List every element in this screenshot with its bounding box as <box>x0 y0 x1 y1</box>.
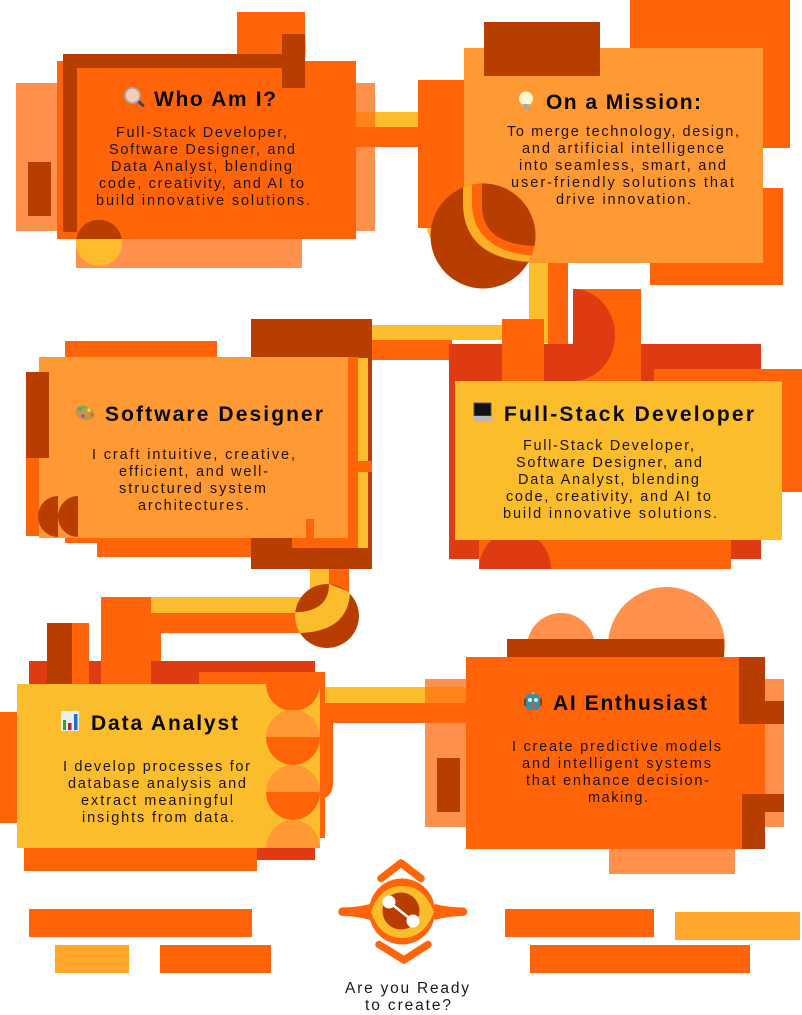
connector: who am i to mission <box>375 112 420 147</box>
text: full-stack body <box>503 438 717 522</box>
text: mission body: user-friendly solutions that <box>511 175 734 191</box>
text: who am i body: Data Analyst, blending <box>111 159 292 175</box>
text: mission body: drive innovation. <box>556 192 691 208</box>
text: mission body <box>507 124 739 208</box>
decorative circle: connector joint <box>293 584 359 648</box>
icon: light bulb <box>519 92 533 110</box>
text: closing question <box>345 980 469 1014</box>
text: software designer body: efficient, and well- <box>119 464 268 480</box>
text: full-stack body: build innovative solutions. <box>503 506 717 522</box>
bottom bars: left <box>29 909 271 973</box>
text: ai enthusiast body: I create predictive models <box>512 739 721 755</box>
text: ai enthusiast body: making. <box>588 790 648 806</box>
text: data analyst body: database analysis and <box>68 776 246 792</box>
text: ai enthusiast body: that enhance decision- <box>526 773 709 789</box>
text: closing question: Are you Ready <box>345 980 469 997</box>
text: ai enthusiast body: and intelligent systems <box>522 756 711 772</box>
panel: full-stack developer <box>449 289 802 569</box>
icon: robot <box>524 692 542 710</box>
text: who am i body: build innovative solutions. <box>96 193 310 209</box>
text: who am i body: Full-Stack Developer, <box>116 125 287 141</box>
text: closing question: to create? <box>365 997 451 1014</box>
text: software designer body: I craft intuitive, creative, <box>92 447 295 463</box>
text: full-stack body: Data Analyst, blending <box>518 472 699 488</box>
panel: on a mission <box>418 0 790 289</box>
bottom bars: right <box>505 909 800 973</box>
text: data analyst body: insights from data. <box>82 810 234 826</box>
text: software designer body <box>92 447 295 514</box>
text: software designer body: structured system <box>119 481 266 497</box>
text: software designer body: architectures. <box>138 498 249 514</box>
connector: data analyst to ai enthusiast <box>320 687 466 799</box>
panel: data analyst <box>0 597 325 871</box>
heading: software designer: Software Designer <box>105 403 323 426</box>
decorative circle with curved bands <box>430 184 536 288</box>
icon: central logo <box>338 863 467 960</box>
text: ai enthusiast body <box>512 739 721 806</box>
heading: ai enthusiast: AI Enthusiast <box>553 692 707 715</box>
panel: who am i <box>16 12 375 268</box>
icon: laptop <box>473 403 492 422</box>
text: full-stack body: Software Designer, and <box>516 455 702 471</box>
text: who am i body <box>96 125 310 209</box>
text: who am i body: code, creativity, and AI to <box>99 176 304 192</box>
text: full-stack body: Full-Stack Developer, <box>523 438 694 454</box>
text: data analyst body: extract meaningful <box>81 793 233 809</box>
panel: ai enthusiast <box>425 587 784 874</box>
heading: full-stack developer: Full-Stack Developer <box>504 403 754 426</box>
heading: data analyst: Data Analyst <box>91 712 238 735</box>
text: mission body: To merge technology, design, <box>507 124 739 140</box>
icon: magnifying glass <box>125 88 143 106</box>
text: who am i body: Software Designer, and <box>109 142 295 158</box>
text: data analyst body: I develop processes for <box>63 759 250 775</box>
heading: who am i: Who Am I? <box>154 88 276 111</box>
text: data analyst body <box>63 759 250 826</box>
panel: software designer <box>26 319 372 569</box>
icon: palette <box>73 403 97 423</box>
icon: bar chart <box>61 711 79 731</box>
heading: on a mission: On a Mission: <box>546 91 701 114</box>
text: mission body: and artificial intelligence <box>522 141 724 157</box>
text: mission body: into seamless, smart, and <box>519 158 726 174</box>
connector: software designer to data analyst <box>151 569 349 633</box>
connector: mission to full-stack <box>372 263 568 360</box>
text: full-stack body: code, creativity, and AI to <box>506 489 711 505</box>
